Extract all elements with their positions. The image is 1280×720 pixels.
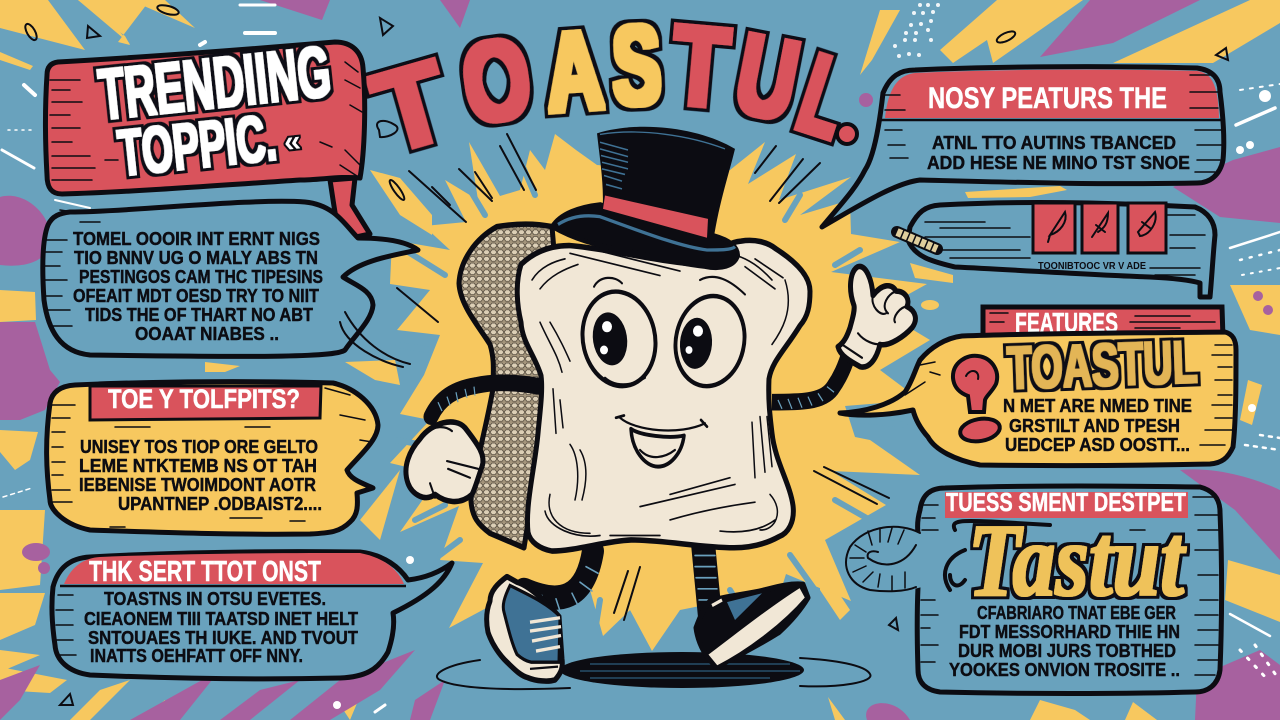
- left hand: [406, 422, 483, 502]
- tastut body text: [949, 603, 1180, 680]
- banner title text: [95, 32, 334, 190]
- panel: tastut bubble: [846, 486, 1222, 694]
- spiral ear: [846, 527, 922, 591]
- title letters: S: [610, 2, 663, 129]
- hat crown: [597, 127, 735, 250]
- bottom left text: CIEAONEM TIII TAATSD INET HELT: [84, 609, 358, 629]
- sunburst behind mascot: [390, 134, 930, 651]
- top right header: NOSY PEATURS THE: [928, 82, 1167, 115]
- panel: trending topic banner: [46, 32, 370, 240]
- left leg: [524, 551, 593, 598]
- tastut body text: DUR MOBI JURS TOBTHED: [958, 641, 1176, 661]
- bottom left text: TOASTNS IN OTSU EVETES.: [104, 589, 326, 609]
- yellow bubble text: UNISEY TOS TIOP ORE GELTO: [80, 437, 318, 457]
- title letters: A: [542, 7, 607, 136]
- intro body text: OOAAT NIABES ..: [135, 324, 279, 344]
- tastut body text: CFABRIARO TNAT EBE GER: [977, 603, 1176, 623]
- right arm: [772, 350, 850, 402]
- tastut header: TUESS SMENT DESTPET: [946, 487, 1186, 517]
- right leg: [703, 543, 710, 617]
- mascot: walking toast with top hat: [406, 127, 915, 681]
- toast front slice: [517, 240, 810, 551]
- tastut body text: FDT MESSORHARD THIE HN: [959, 622, 1180, 642]
- top right text: ATNL TTO AUTINS TBANCED: [932, 133, 1176, 153]
- panel: icon strip bubble: [897, 202, 1215, 297]
- yellow bubble text: LEME NTKTEMB NS OT TAH: [79, 456, 317, 476]
- intro body text: TIDS THE OF THART NO ABT: [85, 305, 313, 325]
- left shoe: [487, 577, 562, 681]
- ground shadow: [437, 652, 870, 689]
- intro body text: TOMEL OOOIR INT ERNT NIGS: [73, 229, 320, 249]
- hat crown sheen: [600, 142, 628, 189]
- intro body text: PESTINGOS CAM THC TIPESINS: [79, 267, 323, 287]
- yellow header bar: TOE Y TOLFPITS?: [108, 384, 300, 414]
- banner title text: TRENDIING: [95, 32, 334, 136]
- arm hatch: [438, 387, 475, 411]
- toastul bubble text: GRSTILT AND TPESH: [1009, 416, 1180, 436]
- toastul bubble text: UEDCEP ASD OOSTT...: [1005, 435, 1190, 455]
- banner title text: TOPPIC.: [115, 100, 280, 190]
- hat brim: [552, 204, 738, 268]
- yellow bubble text: IEBENISE TWOIMDONT AOTR: [79, 475, 316, 495]
- toastul bubble text: [1003, 396, 1192, 455]
- tastut script wordmark: Tastut: [968, 503, 1187, 618]
- panel: intro speech bubble: [43, 201, 418, 367]
- hat band: [603, 196, 708, 238]
- right arm hatch: [778, 387, 834, 409]
- title letters: O: [455, 14, 538, 147]
- bottom left text: INATTS OEHFATT OFF NNY.: [90, 646, 303, 666]
- top hat: [552, 127, 738, 268]
- quote mark: «: [282, 124, 302, 159]
- toastul bubble text: N MET ARE NMED TINE: [1003, 396, 1192, 416]
- title letters: U: [727, 10, 808, 144]
- panel: bottom left bubble: [52, 552, 452, 679]
- right shoe: [696, 584, 808, 667]
- panel: top right bubble: [822, 67, 1224, 227]
- intro body text: OFEAIT MDT OESD TRY TO NIIT: [73, 286, 319, 306]
- toast ink lines: [532, 251, 788, 536]
- title letters: T: [667, 2, 734, 131]
- tastut body text: YOOKES ONVION TROSITE ..: [949, 660, 1180, 680]
- twisted stick highlight: [897, 232, 937, 249]
- left eye: [573, 278, 665, 395]
- question mark icon: [953, 356, 1002, 444]
- intro body text: [73, 229, 323, 344]
- yellow bubble text: UPANTNEP .ODBAIST2....: [118, 494, 322, 514]
- red cards: [1033, 203, 1166, 253]
- bottom left header: THK SERT TTOT ONST: [89, 556, 321, 588]
- crust: [459, 224, 560, 548]
- right hand: [838, 266, 915, 367]
- bottom left text: SNTOUAES TH IUKE. AND TVOUT: [88, 628, 358, 648]
- leg stripes: [542, 556, 718, 611]
- right eye: [667, 277, 753, 395]
- mouth: [616, 416, 707, 467]
- burst streaks: [395, 160, 905, 625]
- top right header: [880, 70, 1222, 120]
- intro body text: TIO BNNV UG O MALY ABS TN: [74, 248, 318, 268]
- bottom left text: [84, 589, 358, 666]
- panel: features label: [983, 307, 1223, 338]
- title letters: T: [361, 37, 462, 177]
- yellow bubble text: [79, 437, 322, 514]
- title letters: L: [786, 31, 862, 162]
- top right text: [927, 133, 1190, 173]
- title: [361, 2, 862, 177]
- panel: features label: FEATURES: [1015, 307, 1118, 338]
- brim sheen: [558, 216, 735, 250]
- title letters: [361, 2, 862, 177]
- top right text: ADD HESE NE MINO TST SNOE: [927, 153, 1190, 173]
- twisted stick: [897, 232, 937, 249]
- panel: yellow speech bubble: [47, 382, 378, 534]
- panel: toastul yellow bubble: [840, 328, 1236, 466]
- card rockets: [1048, 212, 1156, 242]
- left arm: [431, 383, 541, 417]
- strip caption: TOONIBTOOC VR V ADE: [1038, 260, 1146, 272]
- motion lines: [397, 134, 889, 620]
